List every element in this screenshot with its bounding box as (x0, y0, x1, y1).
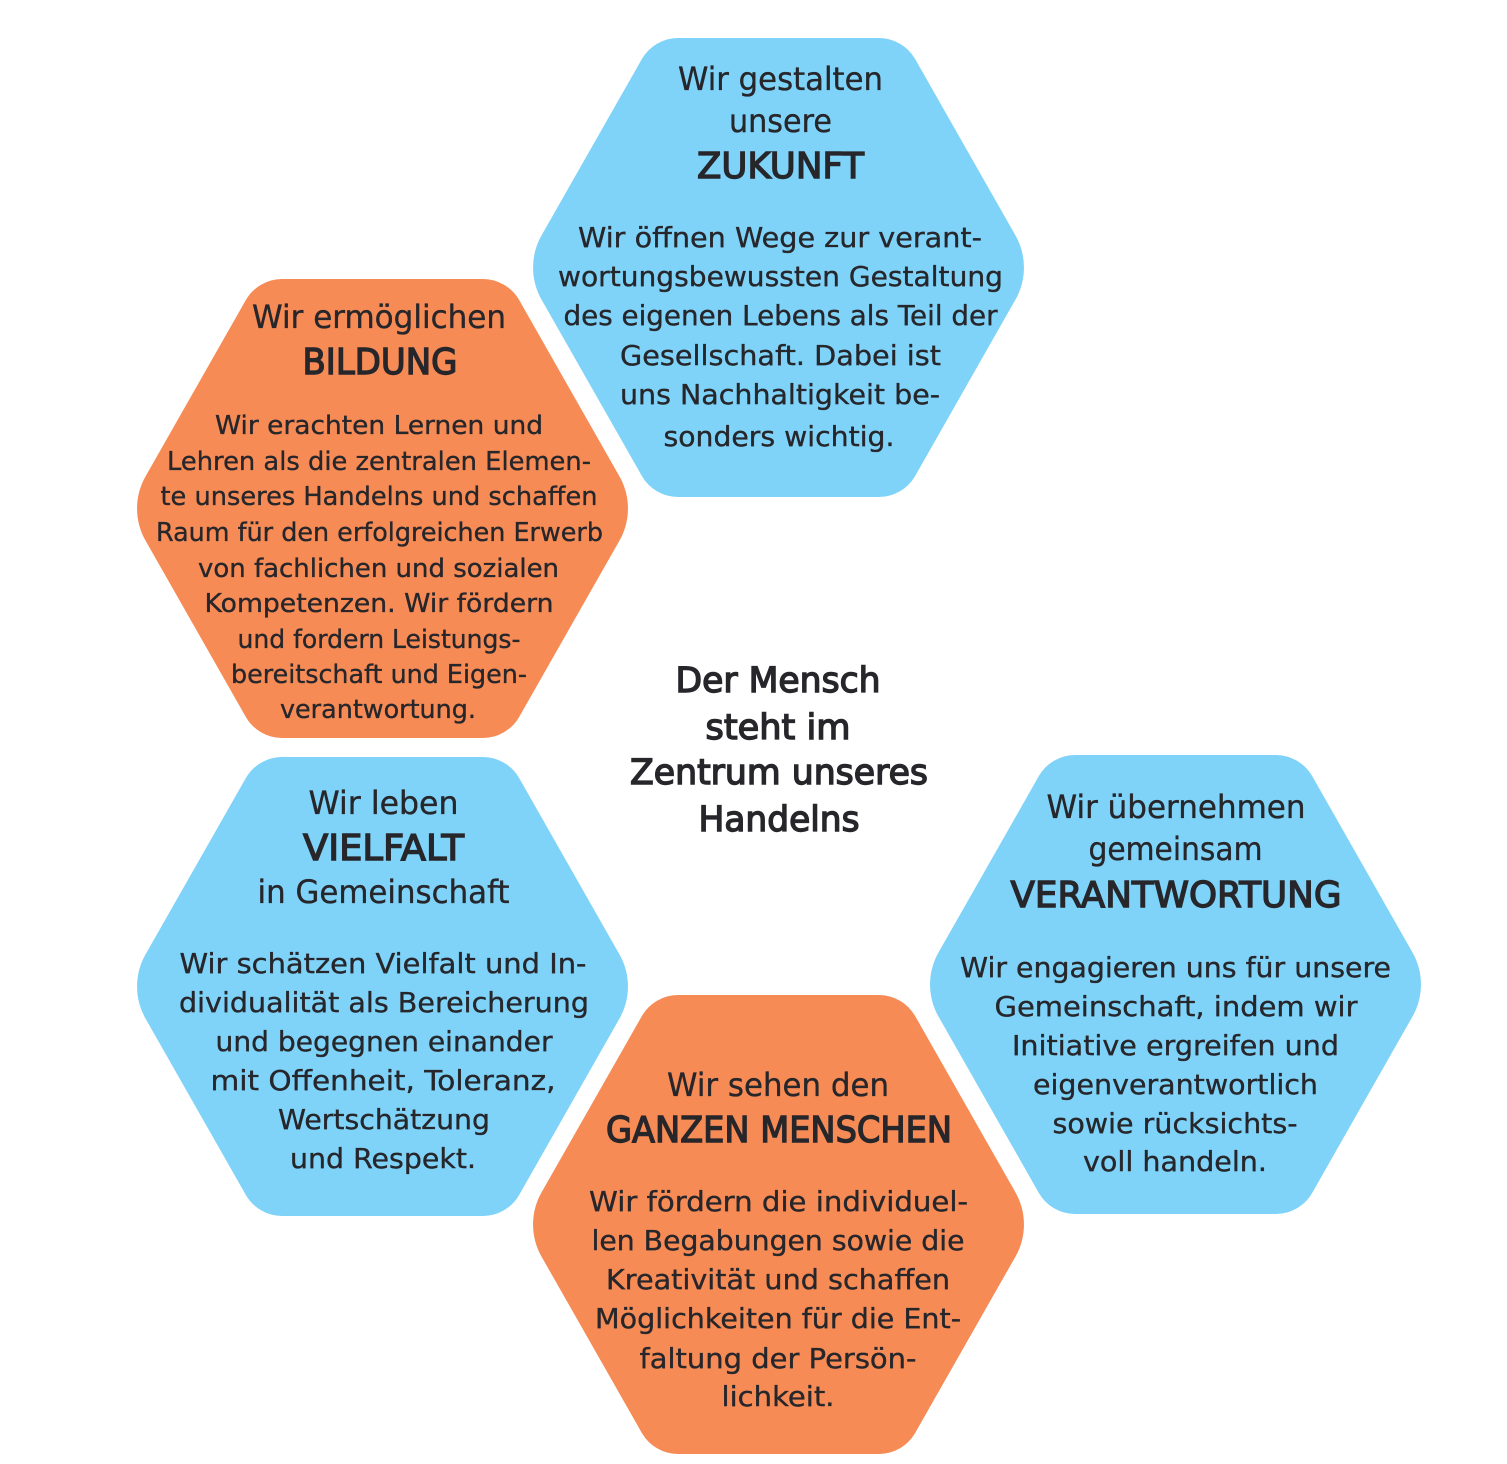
heading: Vielfalt (258, 784, 510, 911)
heading: Verantwortung: Wir übernehmen (1046, 788, 1306, 826)
body text: Zukunft (558, 222, 1003, 453)
body text: Zukunft: uns Nachhaltigkeit be- (620, 379, 940, 411)
body text: Vielfalt: und begegnen einander (216, 1026, 553, 1058)
body text: Bildung: und fordern Leistungs- (238, 625, 520, 655)
heading: Verantwortung (1010, 788, 1342, 916)
body text: Zukunft: Gesellschaft. Dabei ist (620, 340, 941, 372)
body text: Bildung: te unseres Handelns und schaffen (160, 482, 598, 512)
center text: steht im (706, 708, 850, 748)
body text: Zukunft: wortungsbewussten Gestaltung (558, 261, 1003, 293)
heading: Verantwortung: VERANTWORTUNG (1010, 875, 1342, 916)
hexagon shape: Ganzen Menschen (533, 995, 1024, 1454)
body text: Verantwortung: eigenverantwortlich (1033, 1069, 1318, 1101)
center text: Der Mensch (676, 661, 880, 701)
body text: Verantwortung (960, 952, 1391, 1178)
heading: Ganzen Menschen (606, 1066, 952, 1151)
body text: Vielfalt: Wir schätzen Vielfalt und In- (180, 948, 586, 980)
center text: Zentrum unseres (630, 753, 928, 793)
body text: Bildung: Wir erachten Lernen und (215, 411, 543, 441)
body text: Vielfalt: dividualität als Bereicherung (179, 987, 589, 1019)
heading: Bildung: BILDUNG (302, 342, 458, 383)
body text: Vielfalt: Wertschätzung (278, 1104, 490, 1136)
heading: Verantwortung: gemeinsam (1088, 830, 1262, 868)
heading: Zukunft: Wir gestalten (678, 60, 883, 98)
body text: Bildung: Kompetenzen. Wir fördern (204, 589, 554, 619)
heading: Ganzen Menschen: GANZEN MENSCHEN (606, 1110, 952, 1151)
body text: Bildung: von fachlichen und sozialen (198, 554, 559, 584)
body text: Vielfalt: mit Offenheit, Toleranz, (210, 1065, 556, 1097)
heading: Ganzen Menschen: Wir sehen den (667, 1066, 889, 1104)
panel: Ganzen Menschen hexagon (533, 995, 1024, 1454)
body text: Zukunft: Wir öffnen Wege zur verant- (578, 222, 982, 254)
center text: Handelns (698, 800, 860, 840)
body text: Verantwortung: voll handeln. (1083, 1146, 1267, 1178)
body text: Bildung (156, 411, 603, 725)
body text: Zukunft: des eigenen Lebens als Teil der (564, 300, 998, 332)
body text: Ganzen Menschen: Wir fördern die individuel- (589, 1186, 968, 1218)
body text: Ganzen Menschen: Kreativität und schaffen (606, 1264, 950, 1296)
body text: Verantwortung: Gemeinschaft, indem wir (994, 991, 1358, 1023)
body text: Zukunft: sonders wichtig. (664, 421, 894, 453)
hexagon shape: Vielfalt (137, 757, 628, 1216)
heading: Vielfalt: in Gemeinschaft (258, 873, 510, 911)
panel: Bildung hexagon (137, 279, 628, 738)
heading: Zukunft: ZUKUNFT (697, 146, 865, 187)
heading: Vielfalt: VIELFALT (303, 828, 465, 869)
panel: Zukunft hexagon (533, 38, 1024, 497)
body text: Ganzen Menschen (589, 1186, 968, 1413)
panel: Verantwortung hexagon (930, 755, 1421, 1214)
heading: Bildung (252, 298, 506, 383)
body text: Bildung: verantwortung. (280, 695, 476, 725)
body text: Ganzen Menschen: lichkeit. (722, 1381, 834, 1413)
body text: Bildung: bereitschaft und Eigen- (231, 660, 527, 690)
body text: Bildung: Raum für den erfolgreichen Erwerb (156, 518, 603, 548)
body text: Vielfalt: und Respekt. (290, 1143, 476, 1175)
hexagon shape: Verantwortung (930, 755, 1421, 1214)
heading: Vielfalt: Wir leben (308, 784, 458, 822)
heading: Bildung: Wir ermöglichen (252, 298, 506, 336)
body text: Ganzen Menschen: faltung der Persön- (640, 1343, 916, 1375)
center text (630, 661, 928, 840)
body text: Verantwortung: Initiative ergreifen und (1012, 1030, 1339, 1062)
body text: Ganzen Menschen: Möglichkeiten für die Ent- (595, 1303, 961, 1335)
body text: Bildung: Lehren als die zentralen Elemen- (167, 447, 591, 477)
panel: Vielfalt hexagon (137, 757, 628, 1216)
hexagon shape: Zukunft (533, 38, 1024, 497)
body text: Ganzen Menschen: len Begabungen sowie die (592, 1225, 964, 1257)
heading: Zukunft (678, 60, 883, 187)
body text: Verantwortung: sowie rücksichts- (1052, 1108, 1298, 1140)
body text: Vielfalt (179, 948, 589, 1175)
heading: Zukunft: unsere (729, 102, 832, 140)
hexagon shape: Bildung (137, 279, 628, 738)
body text: Verantwortung: Wir engagieren uns für unsere (960, 952, 1391, 984)
